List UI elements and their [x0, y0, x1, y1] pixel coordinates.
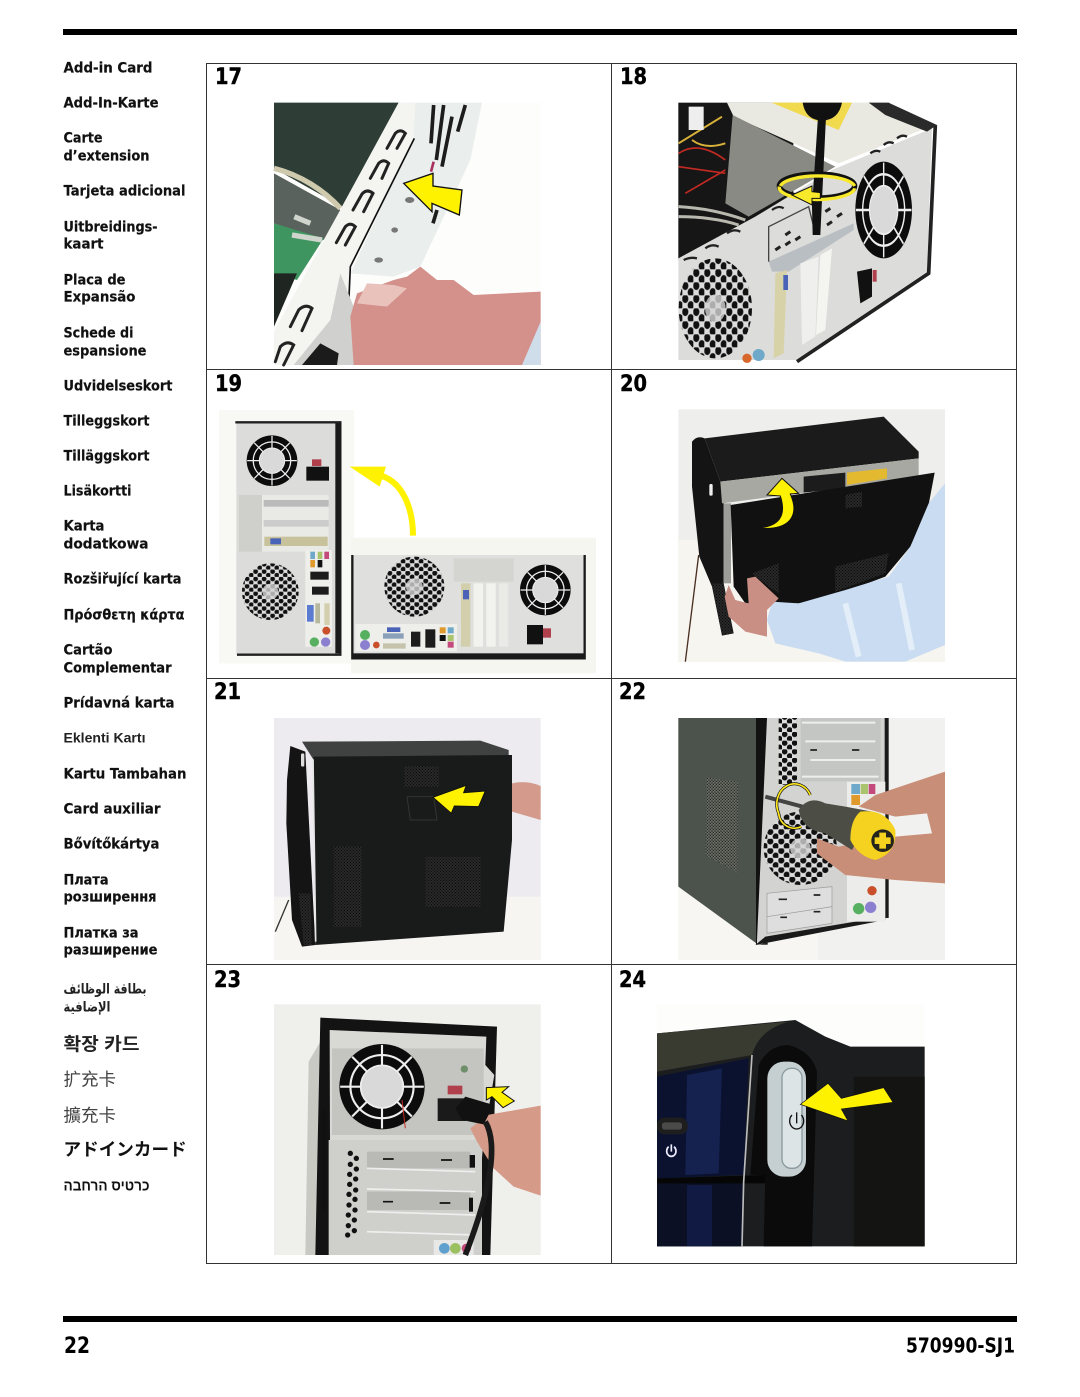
label: Portuguese: Placa de — [64, 272, 126, 288]
step number 17: 17 — [215, 65, 242, 90]
label: Turkish: Eklenti Kartı — [64, 730, 146, 746]
panel: step 22 — [619, 680, 945, 960]
label: Korean: 확장 카드 — [64, 1034, 140, 1054]
photo: plugging in power cord — [274, 1004, 541, 1255]
label: Swedish: Tilläggskort — [64, 448, 150, 464]
step number 18: 18 — [620, 65, 647, 90]
panel: step 19 — [215, 372, 596, 673]
label: Dutch: Uitbreidings- — [64, 220, 158, 236]
label: Bulgarian: разширение — [64, 942, 158, 958]
step number 21: 21 — [214, 680, 241, 705]
label: Arabic: بطاقة الوظائف — [64, 982, 146, 998]
step number 24: 24 — [619, 968, 646, 993]
photo: pressing power button — [657, 1004, 925, 1246]
label: Brazilian Portuguese — [64, 642, 172, 676]
step number 22: 22 — [619, 680, 646, 705]
label: Danish: Udvidelseskort — [64, 378, 173, 394]
label: Norwegian: Tilleggskort — [64, 414, 150, 430]
label: Italian: Schede di — [64, 326, 134, 342]
label: Italian: espansione — [64, 344, 146, 360]
step grid frame — [206, 64, 1016, 1264]
panel: step 18 — [620, 65, 937, 363]
label: Italian — [64, 326, 146, 360]
label: English: Add-in Card — [64, 60, 152, 76]
label: Hebrew: כרטיס הרחבה — [64, 1178, 150, 1194]
top rule — [63, 29, 1017, 35]
label: Finnish: Lisäkortti — [64, 484, 132, 500]
photo: sliding side panel closed — [274, 718, 541, 960]
label: Polish — [64, 518, 148, 552]
label: French — [64, 130, 150, 164]
panel: step 23 — [214, 968, 541, 1255]
label: Portuguese: Expansão — [64, 290, 136, 306]
label: Arabic: الإضافية — [64, 1000, 110, 1016]
photo: tightening screw with screwdriver — [678, 718, 945, 960]
photo: lifting side panel off — [678, 409, 945, 662]
label: Brazilian Portuguese: Complementar — [64, 660, 172, 676]
label: French: Carte — [64, 130, 102, 146]
step number 20: 20 — [620, 372, 647, 397]
label: German: Add-In-Karte — [64, 96, 158, 112]
label: Brazilian Portuguese: Cartão — [64, 642, 113, 658]
label: Dutch — [64, 220, 158, 252]
step number 19: 19 — [215, 372, 242, 397]
label: Arabic — [64, 982, 146, 1016]
bottom rule — [63, 1316, 1017, 1322]
label: Slovak: Prídavná karta — [64, 696, 174, 712]
panel: step 20 — [620, 372, 945, 662]
label: Greek: Πρόσθετη κάρτα — [64, 608, 185, 624]
label: Dutch: kaart — [64, 236, 104, 252]
sidebar: translated labels — [64, 60, 187, 1194]
label: Bulgarian — [64, 926, 158, 958]
label: Ukrainian — [64, 872, 156, 906]
label: French: d’extension — [64, 148, 150, 164]
label: Traditional Chinese: 擴充卡 — [64, 1106, 116, 1126]
label: Hungarian: Bővítőkártya — [64, 836, 160, 852]
panel: step 17 — [215, 65, 541, 365]
photo: removing card from chassis — [274, 103, 541, 365]
photo: tower and landscape rear views — [219, 410, 596, 673]
label: Portuguese — [64, 272, 136, 306]
panel: step 21 — [214, 680, 541, 960]
panel: step 24 — [619, 968, 925, 1246]
page number: 22 — [64, 1334, 90, 1359]
label: Polish: dodatkowa — [64, 536, 148, 552]
photo: unscrewing bracket — [678, 103, 937, 363]
label: Indonesian: Kartu Tambahan — [64, 766, 186, 782]
label: Czech: Rozšiřující karta — [64, 572, 182, 588]
label: Catalan: Card auxiliar — [64, 802, 161, 818]
document number: 570990-SJ1 — [906, 1334, 1015, 1358]
step number 23: 23 — [214, 968, 241, 993]
label: Ukrainian: Плата — [64, 872, 108, 888]
label: Ukrainian: розширення — [64, 890, 156, 906]
label: Polish: Karta — [64, 518, 104, 534]
label: Spanish: Tarjeta adicional — [64, 184, 186, 200]
label: Bulgarian: Платка за — [64, 926, 138, 942]
label: Japanese: アドインカード — [64, 1140, 187, 1160]
label: Simplified Chinese: 扩充卡 — [64, 1070, 116, 1090]
